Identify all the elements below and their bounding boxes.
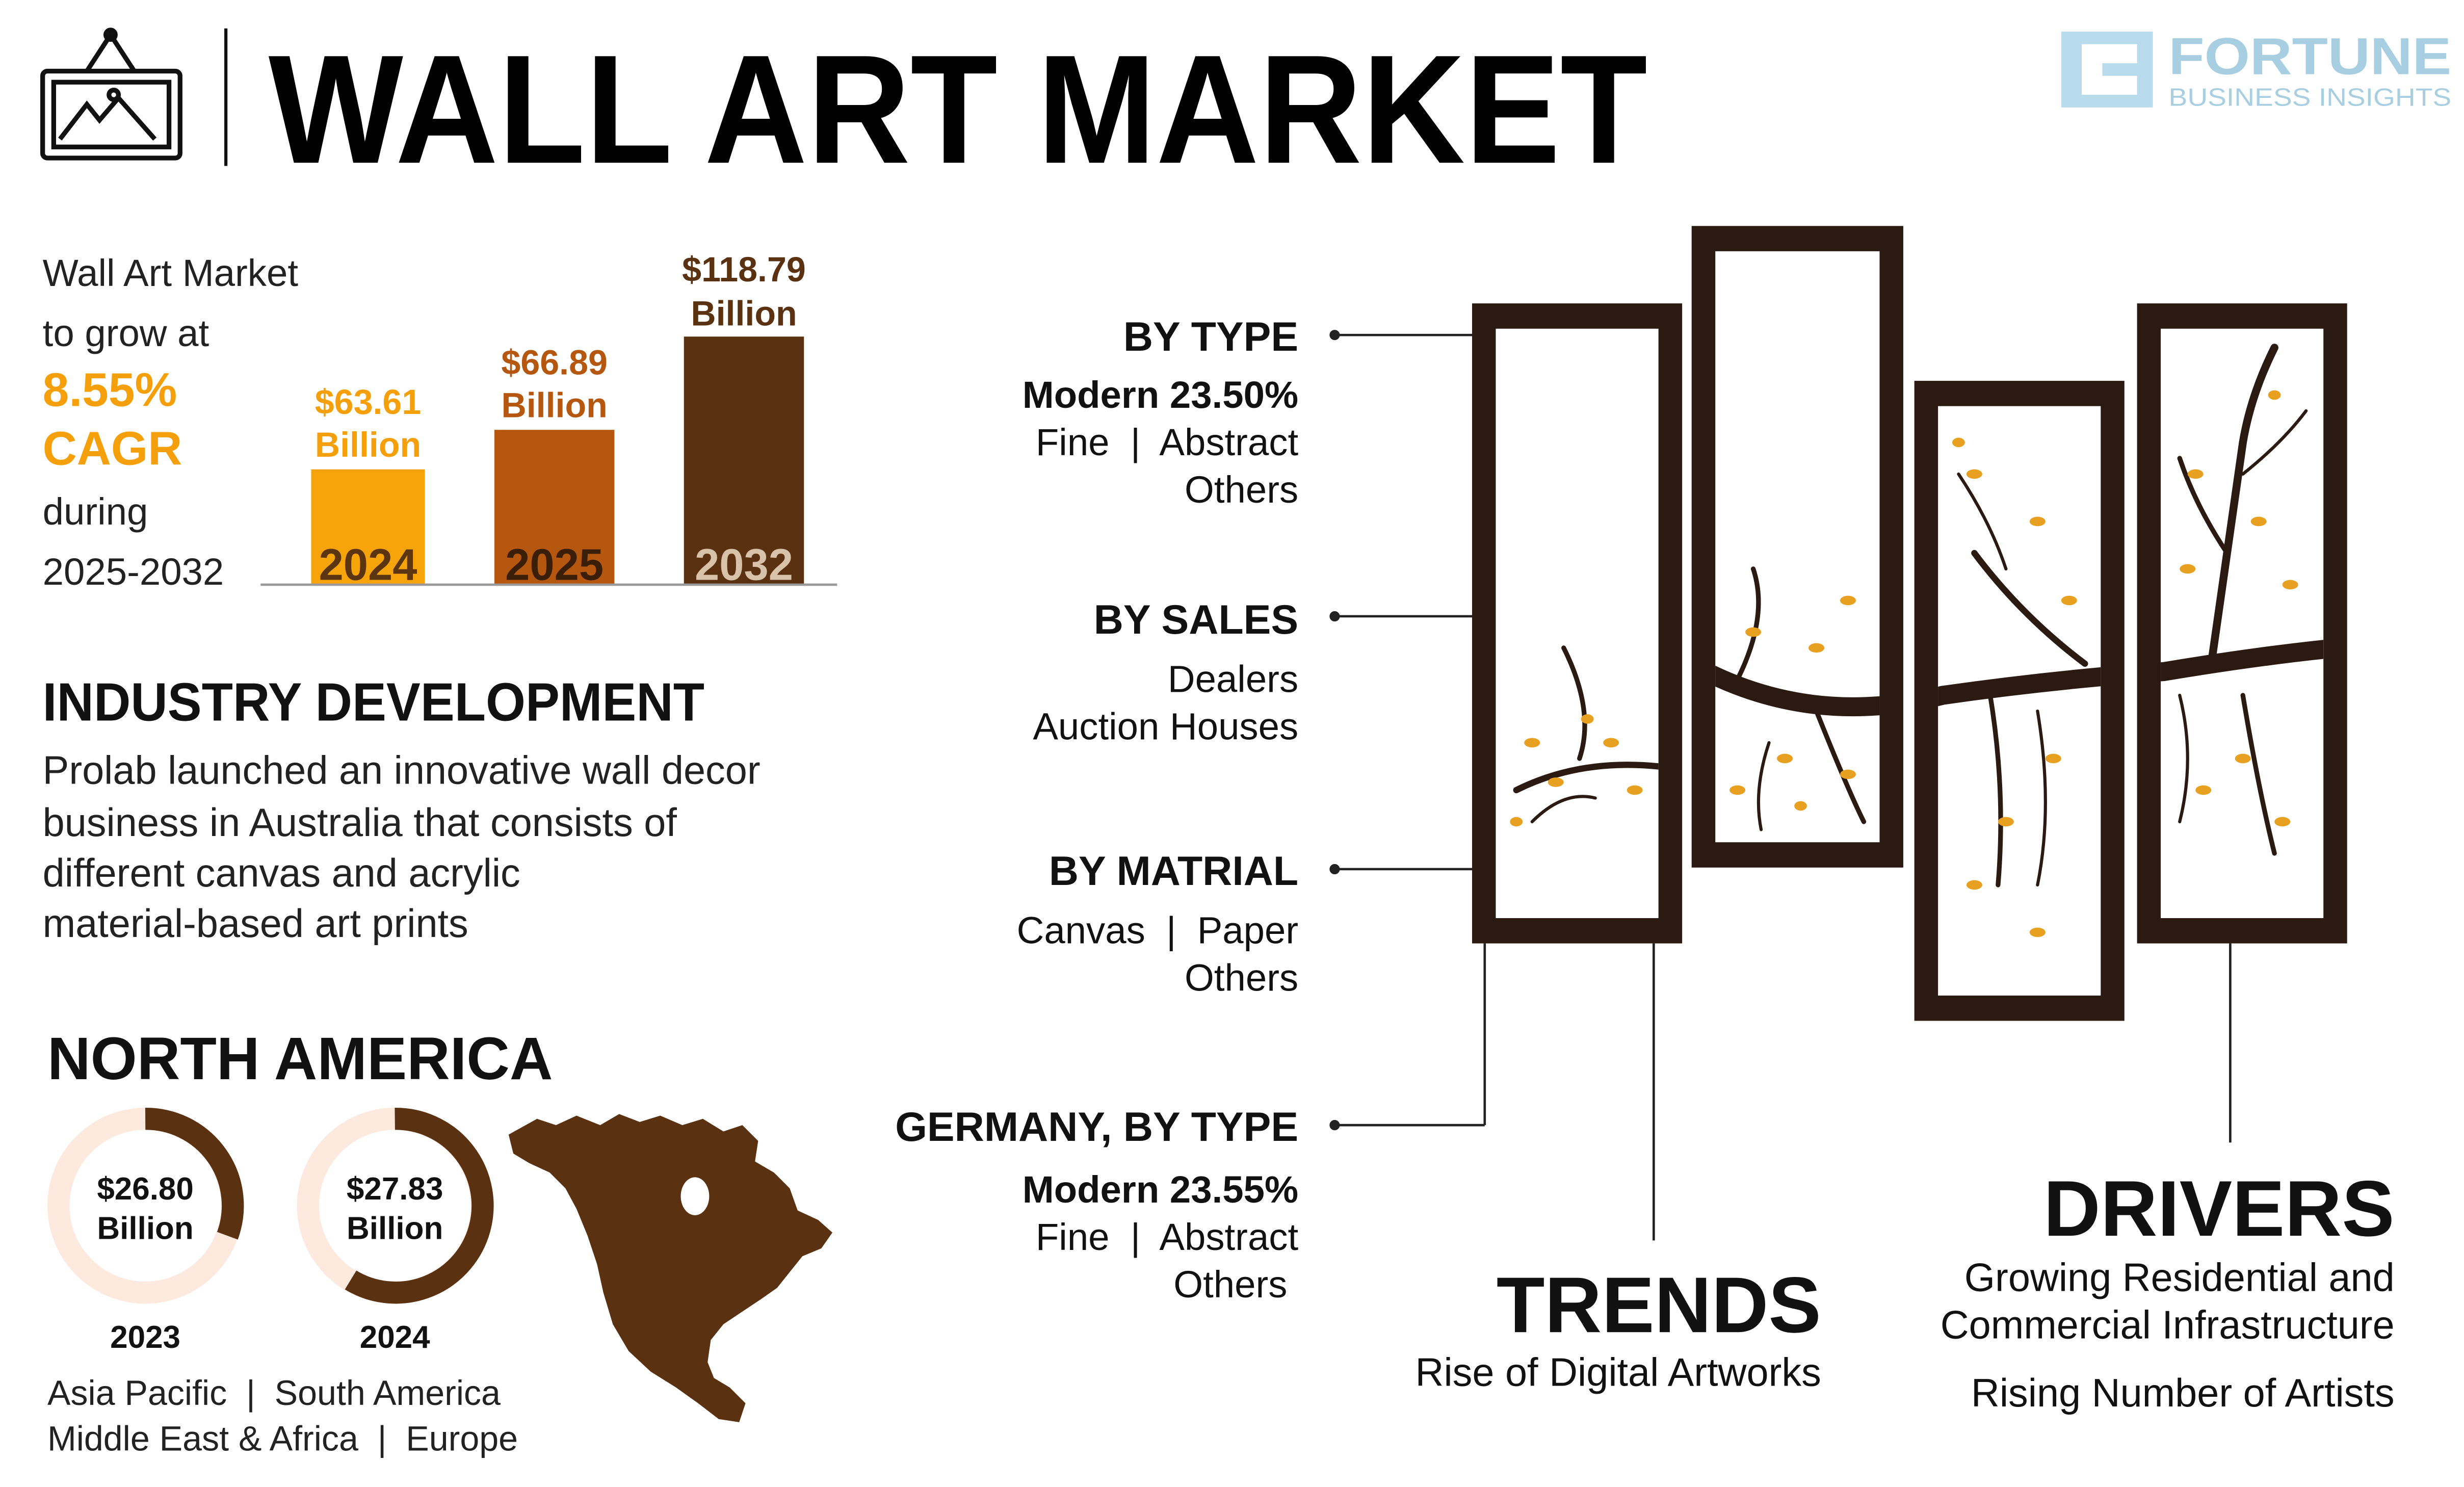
trends: TRENDS [1497,1261,1821,1349]
heading: industry development: INDUSTRY DEVELOPMENT [43,673,704,733]
frames with artwork [1472,226,2347,1021]
panel: segment labels: BY MATRIAL [1049,848,1298,894]
panel: segment labels: Fine | Abstract [1036,1216,1298,1258]
donut 2024: 2024 [360,1320,430,1355]
donut 2024 [308,1119,483,1355]
map: north america [509,1114,832,1422]
panel: segment labels: Canvas | Paper [1017,909,1298,952]
text block: CAGR: 2025-2032 [43,551,224,593]
bar chart: $63.61 [315,383,421,422]
text block: regions: Middle East & Africa | Europe [47,1420,518,1458]
title: WALL ART MARKET [269,23,1647,196]
text block: CAGR: 8.55% [43,363,177,416]
donut 2024: Billion [347,1211,443,1246]
panel: segment labels: BY TYPE [1123,314,1298,360]
drivers: DRIVERS [2043,1164,2395,1253]
text block: industry development: material-based art prints [43,902,468,946]
panel: segment labels [895,314,1298,1306]
text block: CAGR: during [43,490,148,533]
bar chart: 2025 [505,540,604,590]
panel: segment labels: Dealers [1168,658,1298,700]
text block: industry development [43,749,761,946]
panel: segment labels: GERMANY, BY TYPE [895,1104,1298,1150]
panel: segment labels: Others [1173,1263,1287,1306]
panel: segment labels: Fine | Abstract [1036,421,1298,463]
logo [2061,27,2451,112]
text block: CAGR: Wall Art Market [43,252,298,294]
panel: segment labels: Others [1185,468,1298,511]
bar chart: $118.79 [682,250,806,289]
bar chart: Billion [502,386,608,425]
bar chart: $66.89 [501,344,608,382]
panel: segment labels: Others [1185,957,1298,999]
icon: framed picture [43,30,180,158]
text block: CAGR [43,252,298,593]
bar chart: Billion [691,295,797,333]
heading: north america: NORTH AMERICA [47,1025,553,1092]
drivers [1941,1164,2395,1415]
text block: CAGR: to grow at [43,312,209,354]
panel: segment labels: Auction Houses [1033,706,1298,748]
text block: industry development: business in Australia that consists of [43,801,677,845]
bar chart [260,250,837,590]
text block: industry development: Prolab launched an innovative wall decor [43,749,761,793]
donut 2024: $27.83 [347,1171,443,1207]
bar chart: Billion [315,426,421,464]
text block: CAGR: CAGR [43,422,182,475]
text block: regions: Asia Pacific | South America [47,1374,501,1413]
drivers: Growing Residential and [1964,1256,2395,1300]
panel: segment labels: Modern 23.55% [1023,1168,1298,1211]
donut 2023: Billion [97,1211,194,1246]
text block: industry development: different canvas and acrylic [43,851,520,895]
trends: Rise of Digital Artworks [1416,1351,1821,1395]
donut 2023 [59,1119,233,1355]
donut 2023: 2023 [110,1320,180,1355]
text block: regions [47,1374,518,1458]
drivers: Commercial Infrastructure [1941,1303,2395,1347]
bar chart: 2032 [695,540,793,590]
drivers: Rising Number of Artists [1971,1371,2395,1415]
logo: BUSINESS INSIGHTS [2169,83,2451,112]
trends [1416,1261,1821,1395]
logo: FORTUNE [2169,27,2451,86]
donut 2023: $26.80 [97,1171,194,1207]
bar chart: 2024 [319,540,417,590]
panel: segment labels: Modern 23.50% [1023,374,1298,416]
panel: segment labels: BY SALES [1094,597,1298,643]
